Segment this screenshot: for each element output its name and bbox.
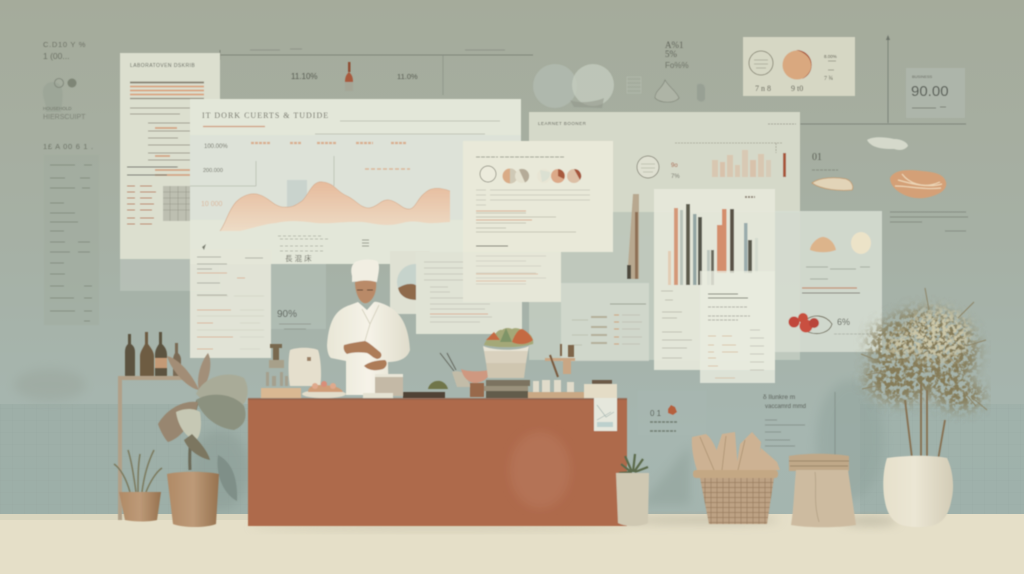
left heading: 1 (00... bbox=[43, 51, 69, 61]
pies bbox=[480, 166, 581, 184]
tree in white pot bbox=[861, 288, 987, 527]
pinned note bbox=[594, 398, 617, 431]
panel: round dish note bbox=[390, 251, 433, 314]
coat bbox=[327, 302, 410, 395]
icons top centre: A%1 bbox=[665, 40, 684, 50]
left caption: HOUSEHOLD bbox=[43, 106, 72, 111]
panel: bar chart bbox=[654, 189, 775, 370]
faint list bbox=[806, 267, 870, 279]
small text blocks bbox=[127, 167, 177, 175]
appliance bbox=[288, 348, 321, 386]
icon: bottle bbox=[345, 62, 353, 91]
glass bowl on stand bbox=[452, 371, 471, 387]
counter bbox=[248, 398, 627, 526]
panel: top right donut card bbox=[743, 37, 855, 96]
chart row labels bbox=[203, 144, 228, 174]
panel: centre report bbox=[463, 141, 613, 302]
canvas bag bbox=[789, 454, 856, 527]
stat card: 90.00: BUSINESS bbox=[912, 74, 933, 79]
values: 7 ¾ bbox=[824, 75, 834, 82]
donut bbox=[782, 50, 812, 80]
counter top items bbox=[261, 328, 617, 431]
values: 9 t0 bbox=[791, 84, 803, 93]
stat card: 90.00 bbox=[906, 68, 965, 118]
chart title: IT DORK CUERTS & TUDIDE bbox=[202, 111, 329, 120]
top timeline with stats bbox=[220, 49, 533, 95]
title bbox=[476, 156, 565, 158]
chart subtitle bbox=[203, 126, 265, 128]
white pot bbox=[883, 456, 953, 527]
stat: 6% bbox=[837, 317, 850, 327]
lower tiled wall band bbox=[0, 404, 1024, 516]
list bbox=[476, 190, 590, 205]
small values bbox=[671, 163, 680, 180]
panel: main area chart: 長 混 床 bbox=[285, 253, 312, 263]
panel: faint centre table bbox=[561, 283, 649, 361]
caption bbox=[890, 212, 968, 231]
icon: food cluster bbox=[43, 78, 76, 112]
circles pair bbox=[533, 64, 614, 108]
small values: 7% bbox=[671, 174, 680, 180]
axis bbox=[800, 35, 966, 124]
large terracotta pot bbox=[167, 472, 219, 527]
panel: main area chart: 10 000 bbox=[201, 201, 223, 208]
panel: right food chart bbox=[775, 211, 882, 352]
left info column bbox=[43, 40, 99, 325]
salad and bowl stack bbox=[484, 328, 533, 347]
wine shelf bbox=[118, 332, 186, 520]
left caption: HIERSCUIPT bbox=[43, 114, 86, 121]
panel: lower centre note bbox=[416, 252, 522, 334]
panel: right big chart bbox=[529, 112, 800, 360]
face bbox=[355, 280, 376, 303]
ring bbox=[637, 156, 659, 178]
stripe chart bbox=[130, 82, 204, 98]
left caption bbox=[43, 106, 86, 121]
values: 8.00% bbox=[824, 54, 837, 59]
lower wall note right: vaccamrd mmd bbox=[765, 404, 806, 410]
pastry plate bbox=[302, 390, 346, 398]
small pot bbox=[119, 492, 161, 522]
chef bbox=[327, 260, 410, 395]
wall shadows bbox=[14, 369, 884, 510]
chart row labels: 100.00% bbox=[204, 144, 228, 150]
panel: back report bbox=[120, 53, 220, 291]
area chart bbox=[220, 182, 450, 231]
icons top centre: 5% bbox=[665, 49, 678, 59]
utensil shelf bbox=[545, 358, 575, 374]
icon: tomatoes bbox=[788, 313, 832, 334]
cups row bbox=[533, 380, 574, 392]
left table: 1£ A 00 6 1 . bbox=[43, 142, 94, 151]
dark dish bbox=[403, 392, 445, 398]
panel heading: LABORATOVEN DSKRIB bbox=[130, 63, 195, 69]
star label bbox=[745, 196, 755, 198]
stat 1: 11.10% bbox=[291, 72, 318, 81]
ring bbox=[749, 51, 773, 75]
lower wall note right bbox=[763, 392, 835, 467]
panel: main area chart bbox=[190, 99, 521, 264]
chart footer labels bbox=[278, 236, 330, 251]
icon: plate bbox=[851, 232, 871, 254]
values: 7 n 8 bbox=[755, 84, 771, 93]
left heading bbox=[43, 40, 86, 61]
heading: LEARNET BOONER bbox=[538, 121, 587, 126]
mixer bbox=[270, 344, 282, 360]
lower wall note right: δ Ilunkre m bbox=[763, 394, 795, 401]
hat bbox=[351, 260, 379, 282]
stat: ninety percent: 90% bbox=[277, 309, 297, 320]
icon: bread slice bbox=[812, 178, 853, 190]
steel pot bbox=[375, 374, 403, 396]
table bbox=[163, 186, 193, 221]
wicker basket with wrapped bread bbox=[692, 432, 780, 524]
floor bbox=[0, 514, 1024, 574]
values bbox=[755, 54, 837, 93]
lower wall note left: 0 1 bbox=[650, 409, 662, 418]
small values: 9o bbox=[671, 163, 678, 169]
large leaf plant bbox=[158, 353, 248, 501]
icons top centre bbox=[627, 40, 705, 102]
icons top centre: Fo%% bbox=[665, 61, 689, 70]
lower wall note left bbox=[637, 390, 707, 436]
bottles bbox=[125, 332, 181, 376]
food note right bbox=[812, 137, 968, 231]
left heading: C.D10 Y % bbox=[43, 40, 86, 49]
list text bbox=[661, 291, 692, 358]
bar group bbox=[712, 150, 786, 177]
floor shadows bbox=[250, 516, 898, 530]
foliage bbox=[866, 310, 984, 409]
tall bars bbox=[627, 194, 639, 279]
stat card: 90.00: 90.00 bbox=[911, 83, 949, 100]
stat 2: 11.0% bbox=[397, 72, 418, 81]
foliage highlights bbox=[884, 309, 970, 361]
stat: ninety percent bbox=[271, 264, 326, 329]
icon: loaf bbox=[890, 170, 946, 198]
icon: bun bbox=[810, 237, 836, 252]
chart row labels: 200.000 bbox=[203, 168, 223, 174]
small succulent and vase bbox=[616, 454, 649, 526]
left table bbox=[43, 142, 99, 325]
panel: lower left list bbox=[190, 250, 271, 358]
small grass plant bbox=[114, 450, 162, 492]
chart side highlight bbox=[287, 180, 307, 208]
trunks bbox=[905, 380, 945, 460]
bars bbox=[668, 204, 758, 285]
jars and tray bbox=[266, 372, 288, 386]
icon: cloud bbox=[867, 137, 908, 150]
chart column labels bbox=[251, 142, 407, 144]
wooden board bbox=[528, 392, 586, 398]
panel: lower table bbox=[700, 271, 775, 383]
food note right: 01 bbox=[812, 152, 822, 163]
bar rows bbox=[130, 108, 203, 167]
stacked boxes bbox=[584, 384, 617, 398]
arms and hands bbox=[344, 341, 381, 359]
